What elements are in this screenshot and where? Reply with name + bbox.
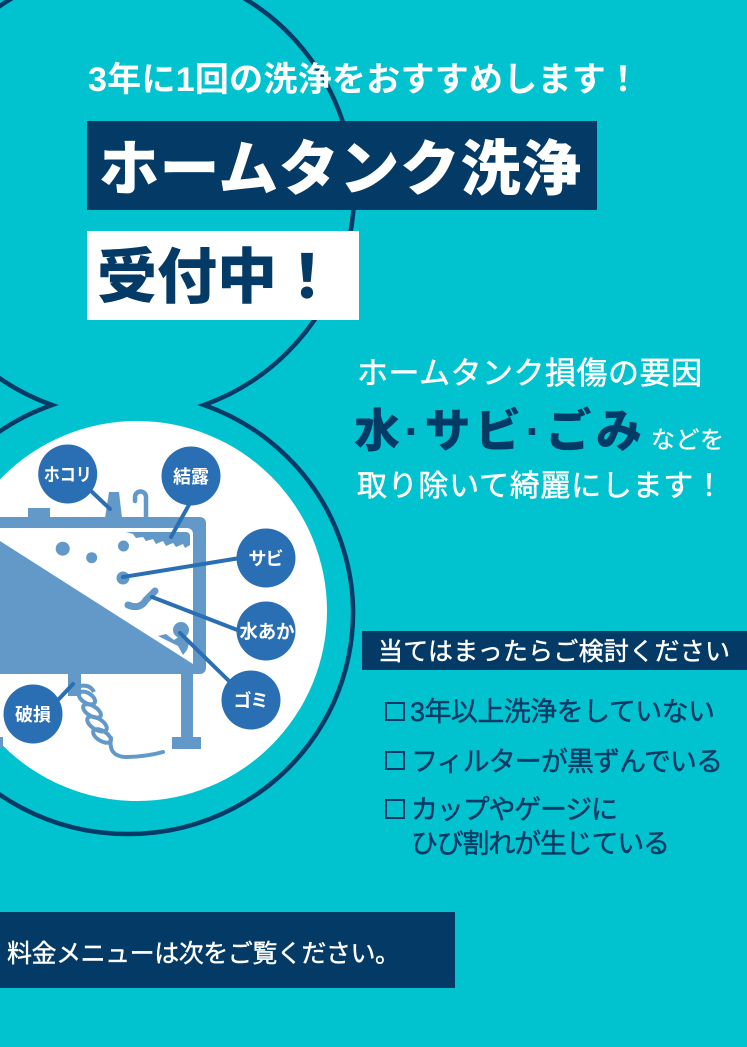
checklist heading	[362, 631, 747, 670]
condensation	[126, 532, 190, 548]
check item 1: 3年以上洗浄をしていない	[410, 697, 715, 727]
top tagline: 3年に1回の洗浄をおすすめします！	[88, 61, 640, 99]
tank interior	[0, 528, 193, 664]
pipe hook	[135, 492, 146, 518]
debris	[158, 622, 190, 655]
footer banner	[0, 912, 455, 988]
title: 受付中！	[87, 231, 359, 320]
title: ホームタンク洗浄: ホームタンク洗浄	[99, 136, 581, 203]
callout: サビ: サビ	[248, 548, 284, 569]
callout: ゴミ: ゴミ	[234, 690, 268, 711]
callout: 破損	[4, 684, 62, 744]
check item 2: フィルターが黒ずんでいる	[411, 747, 723, 777]
callout: 水あか	[236, 602, 296, 660]
callout: ホコリ: ホコリ	[44, 465, 92, 485]
footer banner: 料金メニューは次をご覧ください。	[7, 940, 400, 968]
callout: ホコリ	[38, 444, 97, 504]
callout: 結露: 結露	[173, 467, 209, 487]
text block: causes	[354, 356, 724, 503]
water stain	[128, 591, 155, 607]
checklist heading: 当てはまったらご検討ください	[378, 638, 730, 666]
checklist	[386, 697, 723, 859]
text block: causes: 取り除いて綺麗にします！	[357, 470, 724, 503]
check item 3: ひび割れが生じている	[411, 829, 670, 859]
tank body	[0, 492, 206, 749]
title: 受付中！: 受付中！	[97, 244, 337, 311]
speech bubble outline	[0, 0, 354, 834]
text block: causes: ホームタンク損傷の要因	[357, 356, 702, 391]
callout lines	[58, 490, 240, 700]
coil hose	[77, 686, 163, 757]
check item 3	[386, 795, 670, 859]
callout: 水あか: 水あか	[240, 621, 294, 643]
rust dots	[56, 540, 130, 584]
callout: サビ	[236, 528, 296, 588]
callout: ゴミ	[222, 670, 280, 730]
white circle with tank diagram	[0, 421, 327, 801]
text block: causes: などを	[651, 427, 724, 454]
check item 3: カップやゲージに	[411, 795, 618, 825]
callout: 結露	[162, 446, 220, 506]
text block: causes: 水·サビ·ごみ	[354, 405, 642, 457]
callout: 破損: 破損	[15, 705, 51, 725]
